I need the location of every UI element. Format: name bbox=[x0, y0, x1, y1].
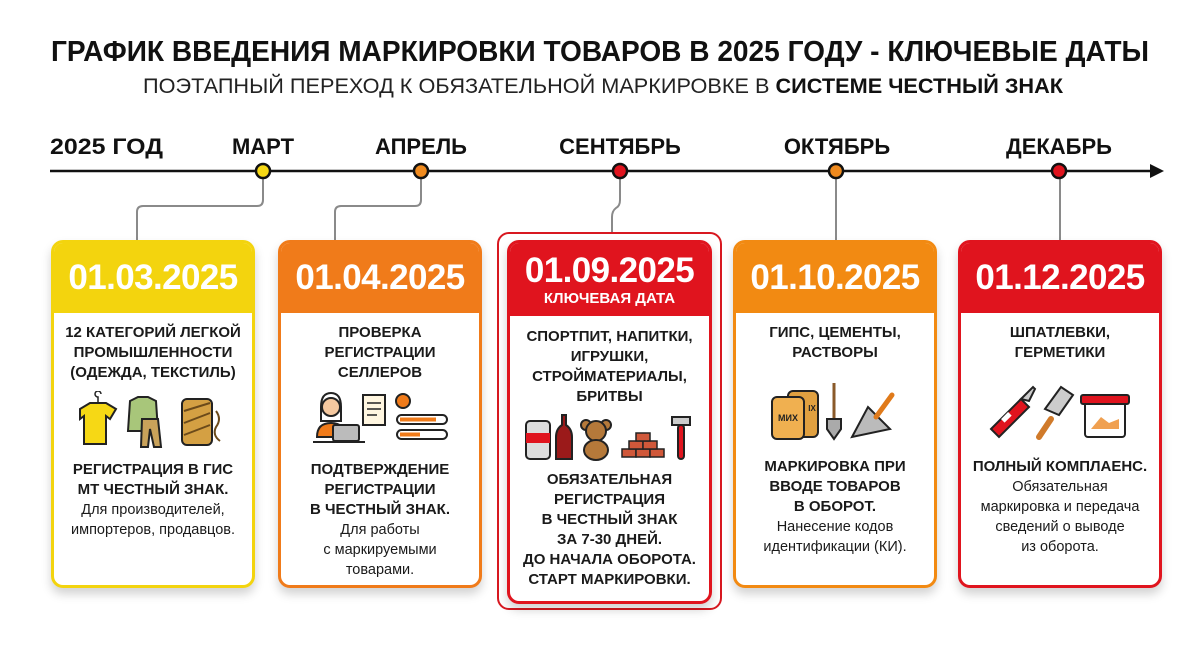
timeline: ДЕКАБРЬ bbox=[1006, 134, 1112, 159]
card 1: March bbox=[51, 240, 255, 588]
card 5: December: ПОЛНЫЙ КОМПЛАЕНС. bbox=[973, 458, 1147, 475]
card 1: March: Для производителей, bbox=[81, 502, 225, 518]
card 2: April: В ЧЕСТНЫЙ ЗНАК. bbox=[310, 501, 450, 518]
card 5: December bbox=[958, 240, 1162, 588]
card 5: December: ГЕРМЕТИКИ bbox=[1015, 344, 1105, 361]
timeline bbox=[50, 134, 1164, 240]
timeline: МАРТ bbox=[232, 134, 295, 159]
card 4: October: 01.10.2025 bbox=[750, 258, 920, 297]
card 5: December: 01.12.2025 bbox=[975, 258, 1145, 297]
card 3: September key date: В ЧЕСТНЫЙ ЗНАК bbox=[542, 511, 677, 528]
card 1: March: 12 КАТЕГОРИЙ ЛЕГКОЙ bbox=[65, 324, 241, 341]
card 3: September key date: КЛЮЧЕВАЯ ДАТА bbox=[544, 290, 675, 307]
card 4: October: ГИПС, ЦЕМЕНТЫ, bbox=[769, 324, 901, 341]
card 1: March: РЕГИСТРАЦИЯ В ГИС bbox=[73, 461, 233, 478]
timeline: 2025 ГОД bbox=[50, 134, 163, 159]
card 3: September key date: СТАРТ МАРКИРОВКИ. bbox=[528, 571, 691, 588]
card 2: April: с маркируемыми bbox=[323, 542, 437, 558]
card 1: March: 01.03.2025 bbox=[68, 258, 238, 297]
card 2: April: РЕГИСТРАЦИИ bbox=[325, 481, 435, 498]
title: ГРАФИК ВВЕДЕНИЯ МАРКИРОВКИ ТОВАРОВ В 2025 ГОДУ - КЛЮЧЕВЫЕ ДАТЫ bbox=[51, 36, 1149, 68]
card 4: October: идентификации (КИ). bbox=[763, 539, 907, 555]
icon: cement: МИХ bbox=[778, 413, 798, 423]
card 2: April bbox=[278, 240, 482, 588]
card 4: October bbox=[733, 240, 937, 588]
timeline: АПРЕЛЬ bbox=[375, 134, 467, 159]
title: ПОЭТАПНЫЙ ПЕРЕХОД К ОБЯЗАТЕЛЬНОЙ МАРКИРОВКЕ В СИСТЕМЕ ЧЕСТНЫЙ ЗНАК bbox=[143, 74, 1063, 98]
card 4: October: РАСТВОРЫ bbox=[792, 344, 878, 361]
timeline: ОКТЯБРЬ bbox=[784, 134, 890, 159]
card 2: April: СЕЛЛЕРОВ bbox=[338, 364, 422, 381]
card 2: April: 01.04.2025 bbox=[295, 258, 465, 297]
card 2: April: товарами. bbox=[346, 562, 414, 578]
card 3: September key date: СПОРТПИТ, НАПИТКИ, bbox=[526, 328, 693, 345]
card 3: September key date: 01.09.2025 bbox=[525, 251, 694, 290]
card 3: September key date: ЗА 7-30 ДНЕЙ. bbox=[557, 531, 662, 548]
card 3: September key date: ОБЯЗАТЕЛЬНАЯ bbox=[547, 471, 672, 488]
icon: cement: IX bbox=[808, 404, 816, 413]
card 3: September key date: БРИТВЫ bbox=[576, 388, 643, 405]
icon: seller check bbox=[313, 392, 448, 443]
timeline: СЕНТЯБРЬ bbox=[559, 134, 681, 159]
card 1: March: ПРОМЫШЛЕННОСТИ bbox=[74, 344, 232, 361]
card 4: October: ВВОДЕ ТОВАРОВ bbox=[769, 478, 901, 495]
card 2: April: РЕГИСТРАЦИИ bbox=[325, 344, 435, 361]
card 2: April: ПОДТВЕРЖДЕНИЕ bbox=[311, 461, 449, 478]
icon: sealants bbox=[990, 386, 1130, 440]
title bbox=[51, 36, 1149, 98]
card 3: September key date bbox=[497, 232, 722, 610]
card 2: April: Для работы bbox=[340, 522, 420, 538]
icon: clothes bbox=[79, 391, 220, 448]
card 3: September key date: СТРОЙМАТЕРИАЛЫ, bbox=[532, 368, 687, 385]
card 4: October: Нанесение кодов bbox=[777, 519, 893, 535]
card 3: September key date: РЕГИСТРАЦИЯ bbox=[554, 491, 665, 508]
card 5: December: из оборота. bbox=[1021, 539, 1099, 555]
card 5: December: Обязательная bbox=[1012, 479, 1108, 495]
card 2: April: ПРОВЕРКА bbox=[338, 324, 422, 341]
card 5: December: ШПАТЛЕВКИ, bbox=[1010, 324, 1110, 341]
card 3: September key date: ДО НАЧАЛА ОБОРОТА. bbox=[523, 551, 696, 568]
card 4: October: В ОБОРОТ. bbox=[794, 498, 876, 515]
card 5: December: маркировка и передача bbox=[981, 499, 1139, 515]
card 3: September key date: ИГРУШКИ, bbox=[571, 348, 648, 365]
icon: cement bbox=[771, 383, 894, 441]
card 1: March: МТ ЧЕСТНЫЙ ЗНАК. bbox=[78, 481, 228, 498]
card 4: October: МАРКИРОВКА ПРИ bbox=[764, 458, 906, 475]
card 1: March: (ОДЕЖДА, ТЕКСТИЛЬ) bbox=[70, 364, 236, 381]
icon: goods bbox=[525, 414, 691, 461]
card 5: December: сведений о выводе bbox=[995, 519, 1125, 535]
card 1: March: импортеров, продавцов. bbox=[71, 522, 235, 538]
